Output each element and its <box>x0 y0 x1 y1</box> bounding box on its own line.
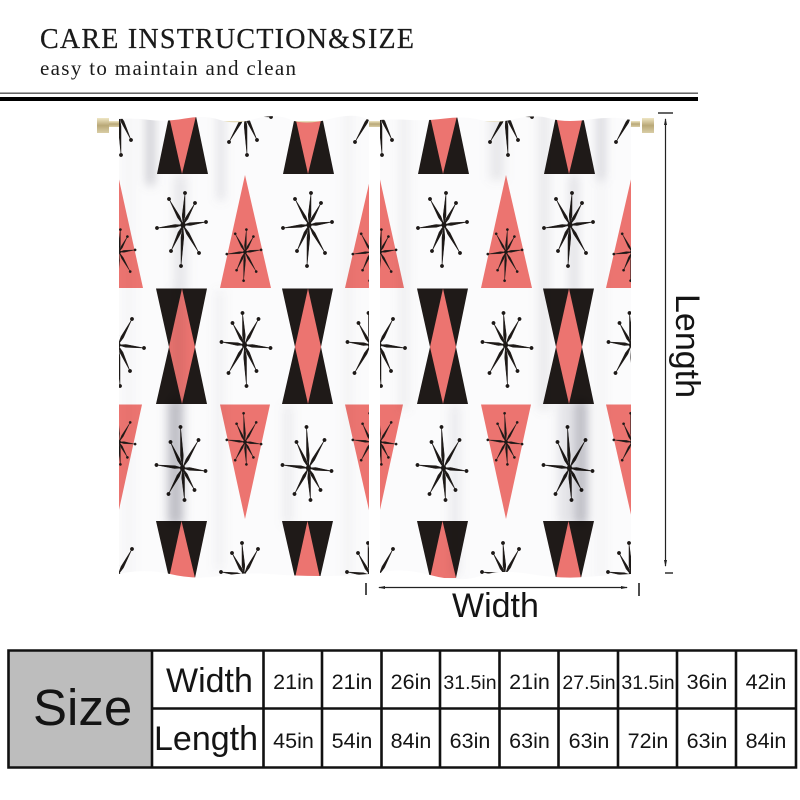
width values: 21in <box>509 670 550 694</box>
row heading: width: Width <box>166 662 253 700</box>
width values: 36in <box>687 670 727 694</box>
length values: 45in <box>273 729 314 753</box>
curtain rod <box>97 118 654 133</box>
row heading: length: Length <box>154 720 258 758</box>
length values: 63in <box>450 729 490 753</box>
length values: 63in <box>509 729 550 753</box>
panel: right curtain <box>380 116 631 578</box>
subtitle: easy to maintain and clean <box>40 56 296 80</box>
width values: 31.5in <box>443 672 497 694</box>
length values: 54in <box>332 729 372 753</box>
title: CARE INSTRUCTION&SIZE <box>40 24 414 55</box>
width values <box>273 670 786 694</box>
size table <box>8 650 796 768</box>
length dimension arrow <box>658 113 673 573</box>
length values: 72in <box>628 729 668 753</box>
panel: left curtain <box>119 116 369 578</box>
width label: Width <box>452 587 539 625</box>
length values <box>273 729 786 753</box>
width values: 26in <box>391 670 431 694</box>
size header cell <box>9 651 152 767</box>
width values: 42in <box>746 670 786 694</box>
size label: Size <box>33 679 132 736</box>
width values: 31.5in <box>621 672 675 694</box>
table grid <box>8 650 796 768</box>
length values: 63in <box>569 729 609 753</box>
length values: 63in <box>687 729 727 753</box>
width values: 27.5in <box>562 672 616 694</box>
length values: 84in <box>391 729 431 753</box>
width values: 21in <box>273 670 314 694</box>
length label: Length <box>668 294 706 398</box>
header rule <box>0 92 698 101</box>
length values: 84in <box>746 729 786 753</box>
width dimension arrow <box>366 583 639 596</box>
width values: 21in <box>332 670 372 694</box>
